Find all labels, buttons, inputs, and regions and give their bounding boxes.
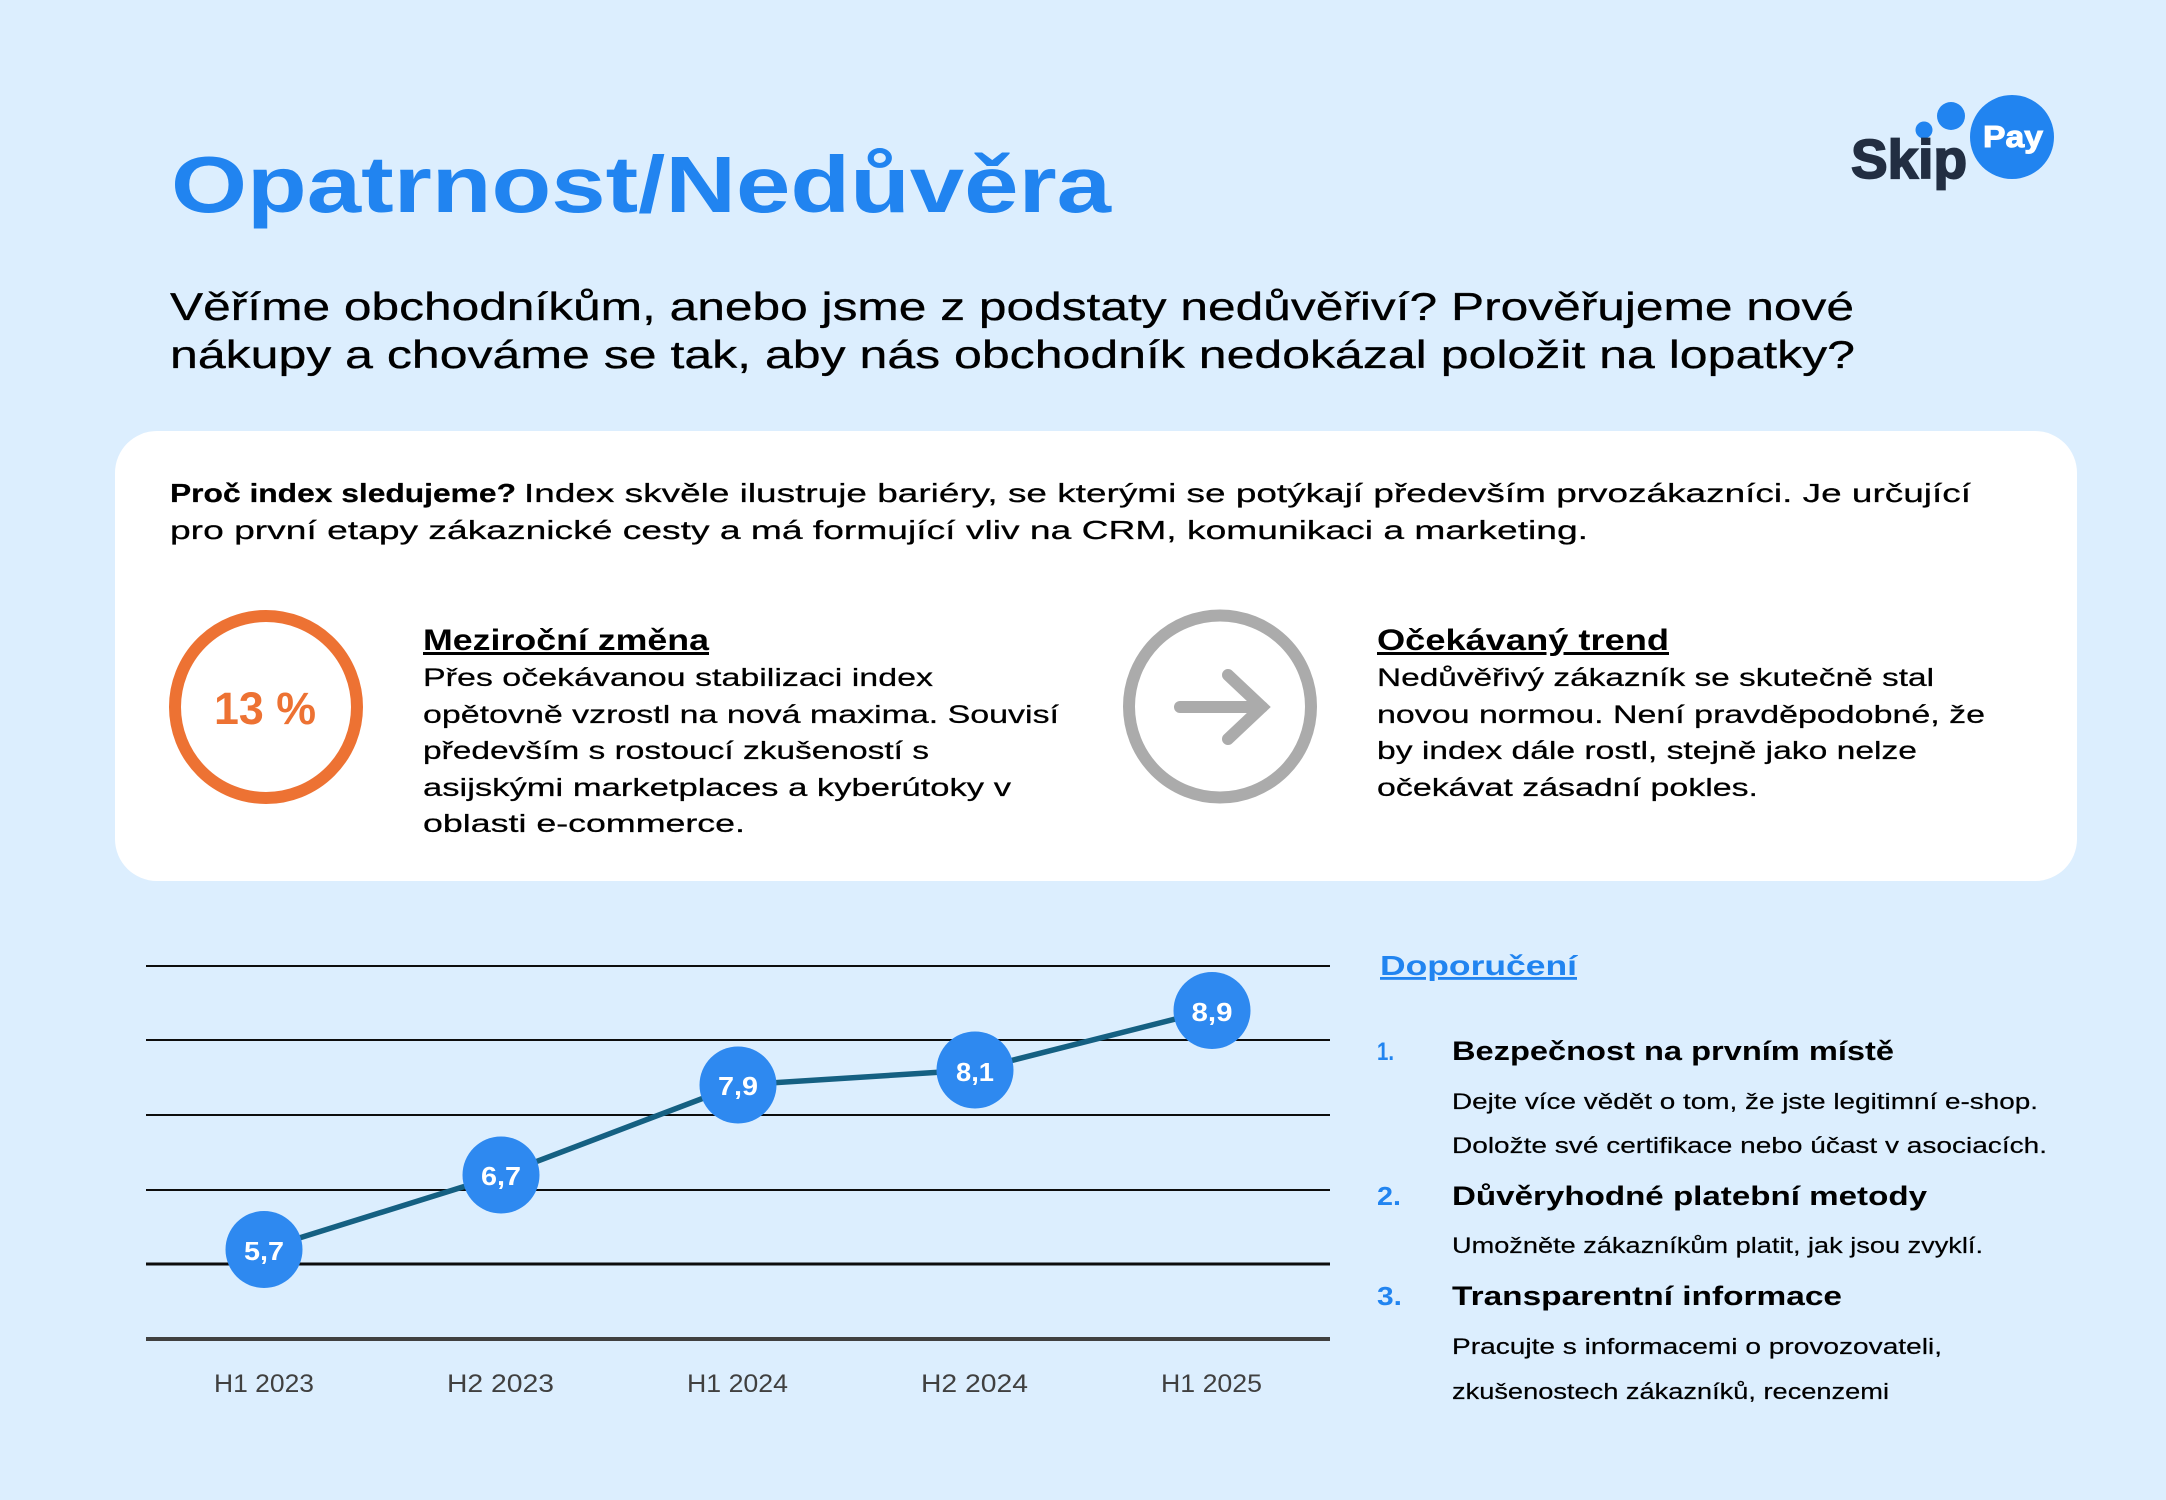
icon: grey arrow in ring [1129,616,1311,798]
x axis labels: H2 2023 [447,1370,554,1398]
subtitle: nákupy a chováme se tak, aby nás obchodník nedokázal položit na lopatky? [170,334,1855,377]
data points [226,972,1250,1288]
recommendation 1: Bezpečnost na prvním místě [1452,1036,1894,1066]
line chart [146,966,1330,1398]
text: year-on-year change [423,624,1059,838]
text: why we track the index: Index skvěle ilustruje bariéry, se kterými se potýkají především prvozákazníci. Je určující [524,478,1972,508]
icon: orange ring 13 %: 13 % [214,683,316,734]
text: why we track the index: pro první etapy zákaznické cesty a má formující vliv na CRM, komunikaci a marketing. [170,515,1588,545]
data line [264,1010,1211,1249]
recommendation 2: 2. [1377,1181,1401,1211]
recommendation 1: 1. [1377,1038,1394,1066]
data points: 8,9 [1192,997,1232,1027]
data points: 5,7 [244,1236,284,1266]
icon: orange ring 13 % [175,616,357,798]
text: expected trend [1377,624,1985,802]
text: year-on-year change: opětovně vzrostl na nová maxima. Souvisí [423,701,1059,729]
text: expected trend: by index dále rostl, stejně jako nelze [1377,737,1917,765]
recommendation 2: Důvěryhodné platební metody [1452,1181,1927,1211]
text: why we track the index [170,478,1972,545]
recommendation 2: Umožněte zákazníkům platit, jak jsou zvyklí. [1452,1233,1983,1258]
recommendation 3: 3. [1377,1281,1402,1311]
recommendation 3: zkušenostech zákazníků, recenzemi [1452,1379,1889,1404]
title: Opatrnost/Nedůvěra [171,140,1112,229]
recommendation 1: Dejte více vědět o tom, že jste legitimní e-shop. [1452,1089,2038,1114]
text: year-on-year change: Meziroční změna [423,624,709,657]
text: expected trend: Očekávaný trend [1377,624,1669,657]
x axis labels: H1 2024 [687,1370,788,1398]
subtitle [170,286,1855,377]
x axis labels: H1 2023 [214,1370,314,1398]
text: expected trend: Nedůvěřivý zákazník se skutečně stal [1377,664,1934,692]
x axis labels: H1 2025 [1161,1370,1262,1398]
panel: index card [115,431,2077,881]
text: year-on-year change: především s rostoucí zkušeností s [423,737,929,765]
x axis labels: H2 2024 [921,1370,1028,1398]
subtitle: Věříme obchodníkům, anebo jsme z podstaty nedůvěřiví? Prověřujeme nové [170,286,1854,329]
heading: recommendations: Doporučení [1380,950,1579,981]
data points: 8,1 [956,1057,994,1087]
x axis labels [214,1370,1262,1398]
logo: Skip Pay: Pay [1983,119,2044,154]
text: expected trend: novou normou. Není pravděpodobné, že [1377,701,1985,729]
text: year-on-year change: Přes očekávanou stabilizaci index [423,664,934,692]
text: why we track the index: Proč index sledujeme? [170,478,516,508]
recommendation 3 [1377,1281,1942,1404]
text: year-on-year change: oblasti e-commerce. [423,810,745,838]
data points: 7,9 [718,1071,758,1101]
panel: recommendations [1377,950,2047,1404]
logo: Skip Pay: Skip [1851,128,1967,190]
recommendation 2 [1377,1181,1983,1258]
recommendation 3: Pracujte s informacemi o provozovateli, [1452,1334,1942,1359]
text: expected trend: očekávat zásadní pokles. [1377,774,1758,802]
recommendation 3: Transparentní informace [1452,1281,1842,1311]
recommendation 1 [1377,1036,2047,1158]
data points: 6,7 [481,1161,521,1191]
text: year-on-year change: asijskými marketplaces a kyberútoky v [423,774,1012,802]
recommendation 1: Doložte své certifikace nebo účast v asociacích. [1452,1133,2047,1158]
logo: Skip Pay [1851,95,2054,190]
